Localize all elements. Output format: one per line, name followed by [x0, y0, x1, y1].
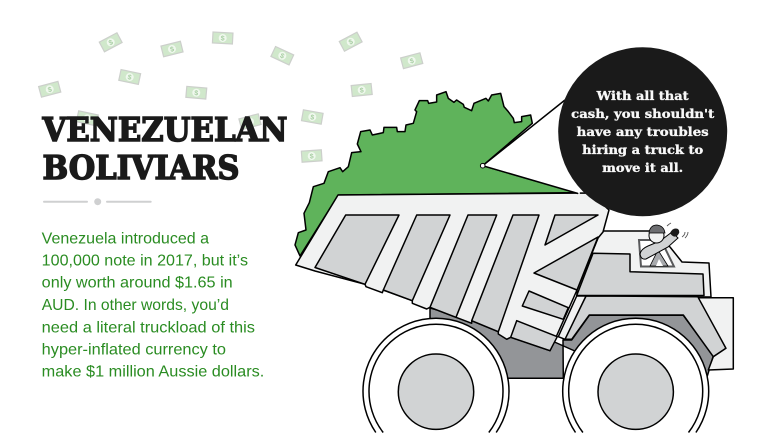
floating banknotes: $ — [170, 46, 175, 54]
speech text: hiring a truck to — [582, 142, 703, 157]
title: VENEZUELAN — [42, 110, 287, 149]
floating banknotes: $ — [310, 153, 314, 161]
cab side panel — [577, 253, 704, 296]
floating banknotes: $ — [409, 58, 415, 66]
front wheel — [563, 318, 709, 432]
speech text: With all that — [596, 88, 689, 103]
floating banknotes: $ — [359, 87, 364, 95]
speech text: cash, you shouldn't — [571, 106, 714, 121]
floating banknotes: $ — [348, 39, 355, 47]
floating banknotes: $ — [310, 114, 315, 122]
body text: need a literal truckload of this — [42, 319, 255, 336]
body text: only worth around $1.65 in — [42, 275, 233, 292]
fender strip — [558, 296, 586, 339]
body text — [42, 230, 264, 381]
body text: 100,000 note in 2017, but it’s — [42, 253, 248, 270]
front bumper — [698, 298, 733, 370]
floating banknotes: $ — [127, 74, 132, 82]
dump bed — [296, 193, 609, 351]
divider — [44, 198, 151, 205]
floating banknotes: $ — [221, 35, 225, 43]
body text: hyper-inflated currency to — [42, 341, 226, 358]
floating banknotes: $ — [194, 90, 199, 97]
floating banknotes: $ — [279, 53, 285, 61]
floating banknotes: $ — [247, 119, 253, 127]
body text: AUD. In other words, you’d — [42, 297, 229, 314]
bed panels — [315, 215, 399, 284]
cab — [577, 231, 711, 297]
cab window — [639, 240, 674, 266]
floating banknotes: $ — [108, 39, 115, 47]
speech text: move it all. — [602, 160, 683, 175]
speech text: have any troubles — [577, 124, 709, 139]
dump truck — [295, 92, 733, 433]
front fender — [563, 296, 726, 357]
floating banknotes — [39, 32, 423, 162]
chassis — [430, 308, 713, 380]
driver waving — [640, 223, 688, 259]
body text: make $1 million Aussie dollars. — [42, 364, 264, 381]
floating banknotes: $ — [84, 115, 90, 123]
title — [42, 110, 287, 187]
body text: Venezuela introduced a — [42, 230, 209, 247]
speech text — [571, 88, 714, 175]
rear wheel — [363, 318, 509, 432]
title: BOLIVIARS — [42, 148, 240, 187]
speech bubble — [480, 47, 727, 216]
floating banknotes: $ — [47, 86, 53, 94]
green cash pile — [295, 92, 577, 256]
